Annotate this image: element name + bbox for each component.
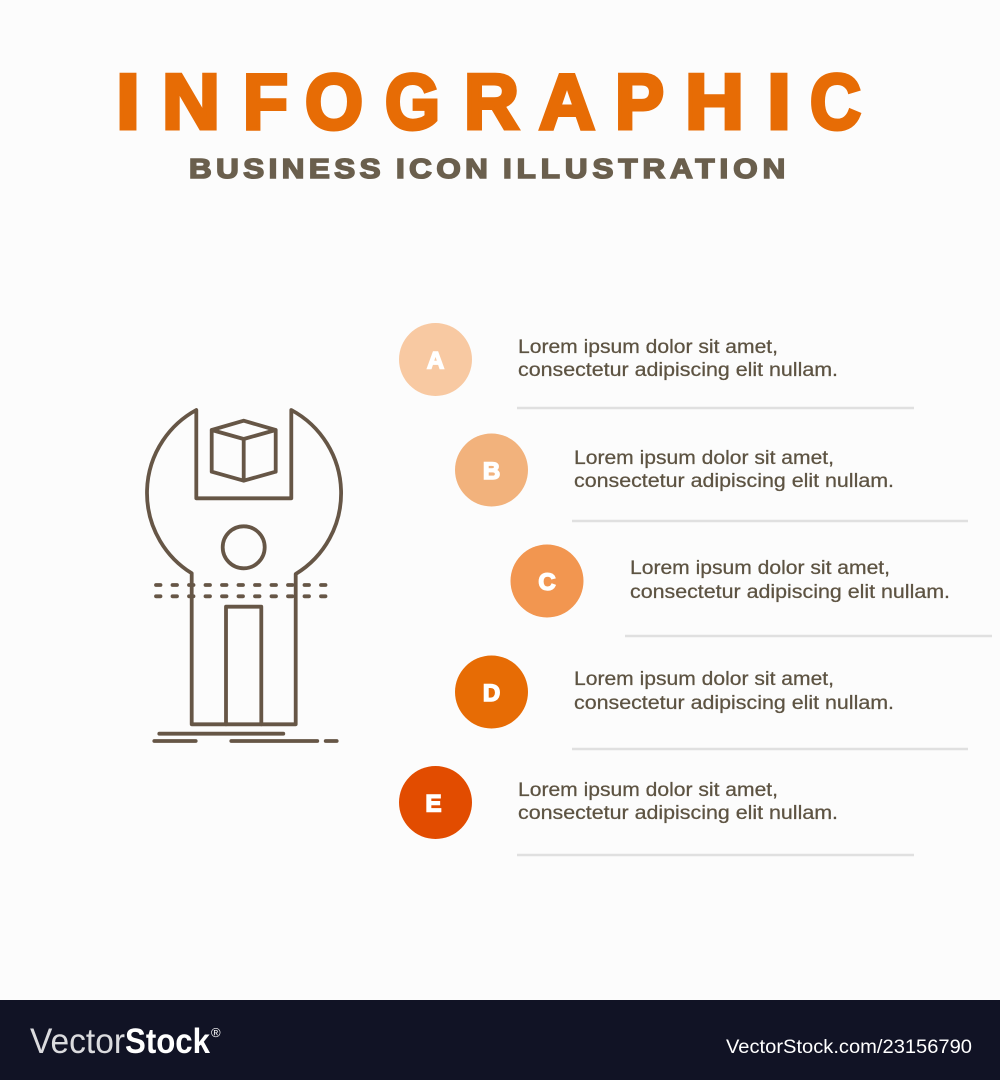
title: G [385,58,440,146]
footer logo: ® [211,1025,221,1040]
title: C [810,58,861,146]
title: I [116,58,140,146]
text C [630,558,950,603]
text E [518,780,838,824]
icon: wrench with cube [147,410,341,741]
title: H [685,58,744,146]
text B: consectetur adipiscing elit nullam. [574,471,894,492]
item E [399,766,914,855]
footer id: VectorStock.com/23156790 [726,1037,972,1058]
badge B [455,434,528,506]
title: I [767,58,791,146]
badge D [455,656,528,728]
item D [455,656,968,749]
badge C [510,544,584,618]
title: A [539,58,595,146]
badge C: C [538,569,556,596]
text E: consectetur adipiscing elit nullam. [518,803,838,824]
subtitle: BUSINESS [189,154,381,185]
text E: Lorem ipsum dolor sit amet, [518,780,778,801]
badge A [399,323,472,396]
item A [399,323,914,408]
badge E: E [425,790,442,818]
title: F [243,58,288,146]
badge A: A [427,348,444,374]
title: N [162,58,220,146]
item C [510,544,992,636]
ground lines [154,734,337,741]
title: R [464,58,519,146]
badge E [399,766,472,839]
item B [455,434,968,521]
text D: Lorem ipsum dolor sit amet, [574,669,834,690]
title: O [305,58,363,146]
text B [574,448,894,492]
dashed lines [156,585,327,596]
subtitle: ILLUSTRATION [503,154,785,185]
text C: consectetur adipiscing elit nullam. [630,582,950,603]
badge D: D [483,680,500,707]
text A: consectetur adipiscing elit nullam. [518,360,838,381]
subtitle [189,154,785,185]
wrench outline [147,410,341,724]
text D [574,669,894,714]
badge B: B [483,458,500,485]
cube [212,421,276,481]
title [116,58,861,146]
footer logo [30,1022,221,1061]
bolt hole [223,526,265,568]
footer logo: Stock [125,1022,210,1061]
text D: consectetur adipiscing elit nullam. [574,693,894,714]
footer logo: Vector [30,1022,125,1061]
text B: Lorem ipsum dolor sit amet, [574,448,834,469]
text C: Lorem ipsum dolor sit amet, [630,558,890,579]
footer bar [0,1000,1000,1080]
subtitle: ICON [396,154,488,185]
door slot [226,607,261,724]
title: P [615,58,664,146]
text A: Lorem ipsum dolor sit amet, [518,337,778,358]
text A [518,337,838,381]
